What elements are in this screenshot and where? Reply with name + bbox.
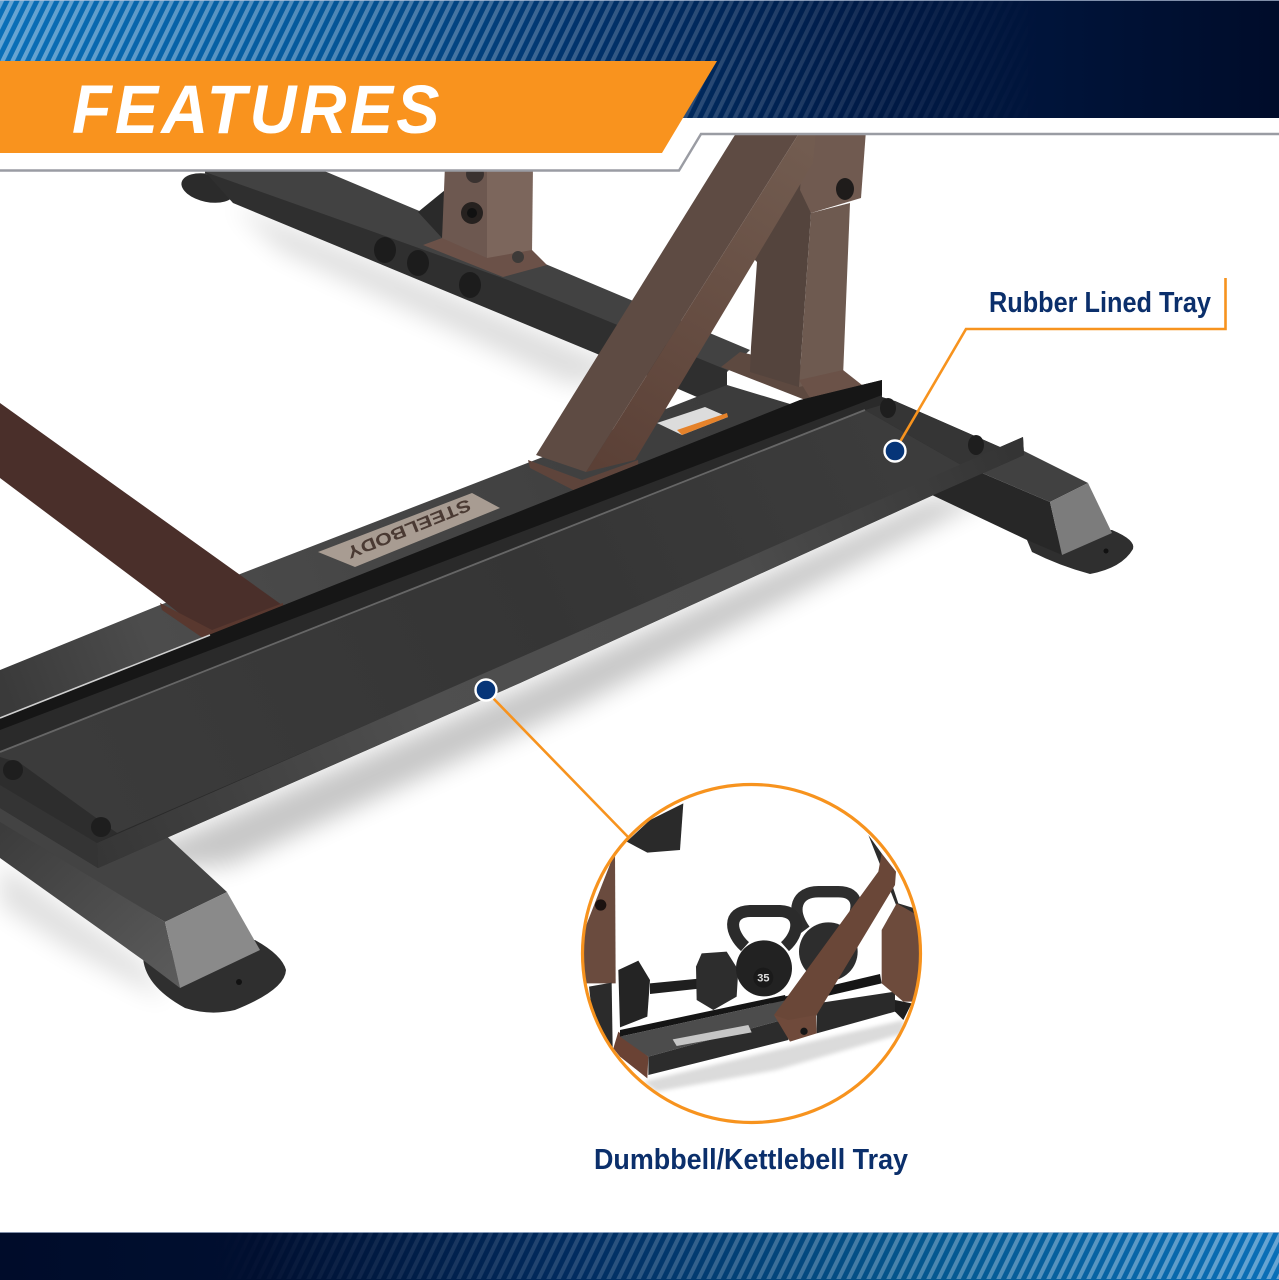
- callout leader line: [897, 278, 1226, 447]
- callout dot: [476, 680, 496, 700]
- front upright post: [750, 130, 866, 403]
- warning sticker: [657, 407, 728, 435]
- rear rail: [179, 165, 750, 410]
- callout dot: [884, 440, 906, 462]
- callout: dumbbell and kettlebell tray: [476, 680, 920, 1176]
- title: FEATURES: [72, 71, 440, 148]
- rail bolts: [374, 237, 481, 298]
- header white strip with grey rule: [0, 118, 1279, 170]
- inset floor shadow: [643, 1020, 903, 1092]
- inset photo: rack with weights: [582, 784, 920, 1122]
- front diagonal brace: [528, 130, 816, 495]
- main beam top face: [0, 385, 810, 720]
- header: striped blue band: [0, 0, 1279, 118]
- inset top block: [627, 803, 683, 853]
- left leg and foot: [0, 795, 286, 1013]
- tray bolts: [3, 398, 984, 837]
- steelbody nameplate: [318, 493, 500, 567]
- steelbody nameplate: STEELBODY: [343, 495, 474, 562]
- orange title banner: [0, 61, 717, 153]
- inset label: Dumbbell/Kettlebell Tray: [594, 1144, 908, 1176]
- rear post base plate: [721, 352, 862, 403]
- callout label: Rubber Lined Tray: [989, 287, 1211, 319]
- front kettlebell: 35: [757, 973, 769, 985]
- rear rail: [771, 974, 882, 1004]
- front kettlebell: [733, 911, 796, 996]
- inset left post: [582, 852, 648, 1078]
- inset beam: [620, 992, 912, 1075]
- dumbbell: [618, 952, 738, 1027]
- rear kettlebell: [797, 892, 858, 981]
- floor shadows: [0, 204, 990, 1000]
- callout: rubber lined tray: [884, 278, 1226, 462]
- inset orange ring: [582, 784, 920, 1122]
- inset right post: [868, 835, 920, 1002]
- rear upright: [418, 165, 547, 277]
- right leg and foot: [932, 450, 1133, 574]
- inset diagonal brace: [774, 853, 896, 1042]
- footer: striped blue band: [0, 1232, 1279, 1280]
- left diagonal brace: [0, 403, 284, 645]
- callout leader line: [490, 695, 629, 838]
- rubber lined tray: [0, 380, 1024, 868]
- product photo: bench base: [0, 130, 1133, 1013]
- inset nameplate: [673, 1025, 752, 1046]
